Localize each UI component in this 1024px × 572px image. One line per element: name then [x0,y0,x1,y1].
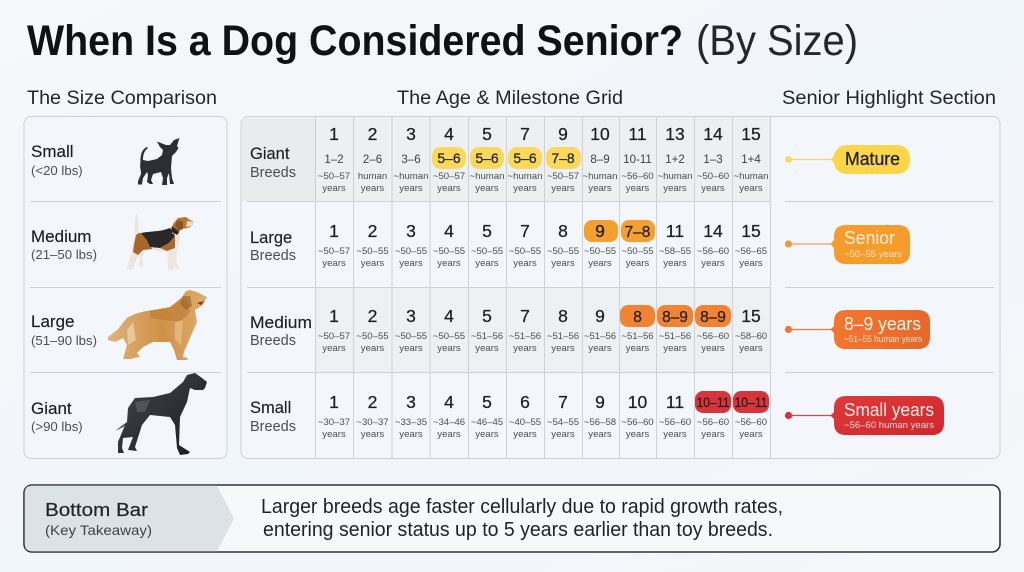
row: medium breeds: 5 [482,306,492,326]
row: giant breeds: 5–6 [513,150,537,166]
panel: age and milestone grid [241,116,1000,458]
row: large breeds: years [322,258,346,269]
highlight pills: orange senior [584,220,655,242]
row: medium breeds: years [513,343,537,354]
size label: medium: (21–50 lbs) [31,247,97,262]
row: large breeds: Breeds [250,248,296,264]
row: medium breeds: 8 [633,309,642,326]
size label: medium [31,227,97,262]
row: large breeds: ~50–55 [471,246,503,257]
row: medium breeds: years [701,343,725,354]
row: small breeds: ~33–35 [395,417,427,428]
size label: large: (51–90 lbs) [31,333,97,348]
row: medium breeds: years [739,343,763,354]
heading: age and milestone grid: The Age & Milestone Grid [397,88,623,109]
row: giant breeds: years [322,183,346,194]
callout: mature: Mature [845,149,900,169]
row: small breeds: ~56–60 [659,417,691,428]
row: giant breeds: years [663,183,687,194]
row: small breeds: ~56–60 [735,417,767,428]
row: medium breeds: ~50–55 [395,331,427,342]
row: large breeds: years [663,258,687,269]
row: large breeds: ~50–55 [433,246,465,257]
row: medium breeds: years [663,343,687,354]
row: giant breeds: 7–8 [551,150,575,166]
panel: size comparison [24,116,227,458]
row: large breeds: years [437,258,461,269]
row: giant breeds: years [361,183,384,194]
row: medium breeds: ~58–60 [735,331,767,342]
row: large breeds: 4 [444,221,454,241]
row: small breeds: 11 [666,392,684,412]
row: large breeds: 3 [406,221,416,241]
row: giant breeds: years [551,183,575,194]
row: large breeds: 15 [741,221,761,241]
panel: bottom bar key takeaway [24,485,1000,552]
row: small breeds: ~56–60 [697,417,729,428]
callout: small years [785,396,944,435]
row: giant breeds: 1+2 [665,154,685,166]
row: medium breeds: ~51–56 [547,331,579,342]
row: large breeds: ~50–55 [395,246,427,257]
row: medium breeds: years [322,343,346,354]
row: large breeds: ~50–55 [621,246,654,257]
row: giant breeds: ~human [508,171,542,182]
row: giant breeds: 10-11 [623,154,652,166]
row: large breeds: years [626,258,649,269]
row: medium breeds: ~56–60 [697,331,729,342]
highlight pills: deep orange senior [620,305,731,327]
row: giant breeds: years [739,183,763,194]
row: medium breeds: ~50–55 [433,331,465,342]
row: small breeds: years [361,429,384,440]
row: medium breeds: years [399,343,423,354]
callout: small years: Small years [844,399,934,420]
size label: giant: (>90 lbs) [31,419,83,434]
row: medium breeds: ~51–56 [659,331,691,342]
row: giant breeds: 11 [628,124,647,144]
row: giant breeds: 1+4 [741,154,761,166]
row: small breeds: 7 [558,392,568,412]
callout: 8-9 years: 8–9 years [844,313,921,334]
row: giant breeds: years [475,183,499,194]
row: large breeds: 5 [482,221,492,241]
row: large breeds: years [739,258,763,269]
row: giant breeds: 5–6 [437,150,461,166]
row: large breeds: ~58–55 [659,246,691,257]
highlight pills: red senior [695,391,769,413]
row: small breeds: ~56–60 [621,417,654,428]
row: medium breeds: 8 [558,306,568,326]
row: giant breeds: ~human [583,171,617,182]
row: large breeds: years [701,258,725,269]
row: giant breeds: human [358,171,387,182]
row: small breeds: Small [250,399,291,417]
row: giant breeds [250,124,768,194]
row: small breeds: years [588,429,612,440]
bottom bar chevron label: (Key Takeaway) [45,522,152,538]
row: giant breeds: 13 [665,124,685,144]
row: medium breeds: 15 [741,306,761,326]
row: giant breeds: ~human [470,171,504,182]
callout: mature [785,145,910,174]
row: small breeds: years [701,429,725,440]
row: medium breeds: Breeds [250,333,296,349]
title: When Is a Dog Considered Senior? [27,18,683,65]
row: small breeds: 10–11 [734,394,768,410]
row: medium breeds: years [475,343,499,354]
row: giant breeds: 2 [368,124,377,144]
row: large breeds: years [551,258,575,269]
row: medium breeds: years [626,343,649,354]
row: medium breeds: 7 [520,306,530,326]
row: small breeds: ~54–55 [547,417,579,428]
title: (By Size) [696,18,858,65]
row: giant breeds: ~50–57 [547,171,579,182]
row: large breeds: ~56–65 [735,246,767,257]
row: giant breeds: 3 [406,124,416,144]
row: large breeds [250,221,767,269]
row: small breeds: years [739,429,763,440]
row: giant breeds: Breeds [250,165,296,181]
row: small breeds: ~40–55 [509,417,541,428]
row: giant breeds: 1–3 [703,154,723,166]
row: giant breeds: years [513,183,537,194]
row: large breeds: 7 [520,221,530,241]
row: small breeds: ~30–37 [356,417,389,428]
row: small breeds: ~46–45 [471,417,503,428]
row: small breeds: years [663,429,687,440]
row: small breeds: ~30–37 [318,417,350,428]
row: large breeds: ~50–55 [356,246,389,257]
row: large breeds: 8 [558,221,568,241]
row: medium breeds: ~51–56 [621,331,654,342]
row: small breeds: years [513,429,537,440]
row: giant breeds: 8–9 [590,154,610,166]
size label: small [31,142,83,178]
row: giant breeds: years [437,183,461,194]
row: small breeds: 5 [482,392,492,412]
takeaway text [261,496,783,541]
row: giant breeds: ~human [734,171,768,182]
size label: small: (<20 lbs) [31,163,83,178]
row: small breeds: 4 [444,392,454,412]
row: giant breeds: ~50–60 [697,171,729,182]
row: small breeds: years [626,429,649,440]
size label: small: Small [31,142,74,161]
row: medium breeds: Medium [250,314,312,332]
row: small breeds: years [551,429,575,440]
row: medium breeds: 9 [595,306,605,326]
row: large breeds: 7–8 [625,224,650,241]
row: large breeds: ~50–55 [509,246,541,257]
row: small breeds: 1 [329,392,339,412]
row: giant breeds: years [626,183,649,194]
icon: medium dog (beagle) [127,213,194,270]
row: giant breeds: years [399,183,423,194]
row: giant breeds: 7 [520,124,530,144]
row: small breeds: ~56–58 [584,417,616,428]
row: medium breeds: years [361,343,384,354]
highlight pills: yellow mature [432,147,581,169]
callout: senior [785,225,910,264]
icon: large dog (golden retriever) [108,290,207,360]
row: giant breeds: 1–2 [324,154,344,166]
row: small breeds: ~34–46 [433,417,465,428]
heading: senior highlight section: Senior Highlight Section [782,88,996,109]
row: small breeds: 9 [595,392,605,412]
row: giant breeds: ~56–60 [621,171,654,182]
size label: medium: Medium [31,227,91,246]
row: giant breeds: 5–6 [475,150,499,166]
callout: senior: Senior [844,228,895,248]
callout: senior: ~50–55 years [844,249,902,260]
row: large breeds: 14 [703,221,723,241]
row: large breeds: ~50–55 [584,246,616,257]
row: giant breeds: 5 [482,124,492,144]
row: large breeds: years [475,258,499,269]
size label: giant [31,399,83,434]
row: large breeds: 11 [666,221,684,241]
row: medium breeds: 4 [444,306,454,326]
row: small breeds: 10–11 [696,394,730,410]
row: giant breeds: 10 [590,124,610,144]
row: small breeds: years [322,429,346,440]
takeaway text: Larger breeds age faster cellularly due to rapid growth rates, [261,496,783,518]
medium row tint [315,288,770,372]
row: giant breeds: 14 [703,124,723,144]
row: large breeds: years [399,258,423,269]
row: large breeds: years [513,258,537,269]
row: giant breeds: 9 [558,124,568,144]
row: giant breeds: years [588,183,612,194]
size label: large [31,312,97,348]
row: giant breeds: 2–6 [363,154,382,166]
takeaway text: entering senior status up to 5 years earlier than toy breeds. [263,519,773,541]
row: small breeds: 2 [368,392,377,412]
row: giant breeds: years [701,183,725,194]
row: giant breeds: 3–6 [401,154,421,166]
row: medium breeds: 2 [368,306,377,326]
bottom bar chevron label [25,486,234,551]
row: small breeds: years [475,429,499,440]
row: medium breeds: years [437,343,461,354]
row: medium breeds: years [551,343,575,354]
row: large breeds: years [361,258,384,269]
size label: large: Large [31,312,74,331]
row: medium breeds: years [588,343,612,354]
row: small breeds [250,392,768,440]
row: giant breeds: 4 [444,124,454,144]
row: medium breeds: ~50–57 [318,331,350,342]
row: medium breeds: 8–9 [662,309,688,326]
row: medium breeds: ~51–56 [584,331,616,342]
row: giant breeds: ~50–57 [318,171,350,182]
row: small breeds: Breeds [250,419,296,435]
row: medium breeds: ~50–55 [356,331,389,342]
row: medium breeds: 8–9 [700,309,726,326]
row: large breeds: 1 [329,221,339,241]
size label: giant: Giant [31,399,72,418]
row: giant breeds: ~human [658,171,692,182]
callout: 8-9 years: ~51–55 human years [844,334,922,345]
row: giant breeds: ~50–57 [433,171,465,182]
heading: size comparison: The Size Comparison [27,88,217,109]
row: giant breeds: ~human [394,171,428,182]
row: giant breeds: 1 [329,124,339,144]
row: large breeds: 9 [595,221,605,241]
row: large breeds: Large [250,229,292,247]
bottom bar chevron label: Bottom Bar [45,500,148,520]
row: large breeds: years [588,258,612,269]
row: medium breeds [250,306,767,354]
row: small breeds: years [437,429,461,440]
giant row tint [242,118,770,201]
icon: small dog (chihuahua) [138,138,180,185]
row: large breeds: 2 [368,221,377,241]
row: small breeds: 10 [628,392,647,412]
row: medium breeds: 3 [406,306,416,326]
row: large breeds: ~50–57 [318,246,350,257]
row: large breeds: ~56–60 [697,246,729,257]
row: medium breeds: ~51–56 [509,331,541,342]
callout: small years: ~56–60 human years [844,420,934,431]
row: small breeds: years [399,429,423,440]
row: large breeds: ~50–55 [547,246,579,257]
callout: 8-9 years [785,310,930,349]
row: giant breeds: Giant [250,145,290,163]
row: medium breeds: 1 [329,306,339,326]
row: giant breeds: 15 [741,124,761,144]
icon: giant dog (great dane) [115,373,207,455]
row: small breeds: 3 [406,392,416,412]
row: small breeds: 6 [520,392,530,412]
row: medium breeds: ~51–56 [471,331,503,342]
